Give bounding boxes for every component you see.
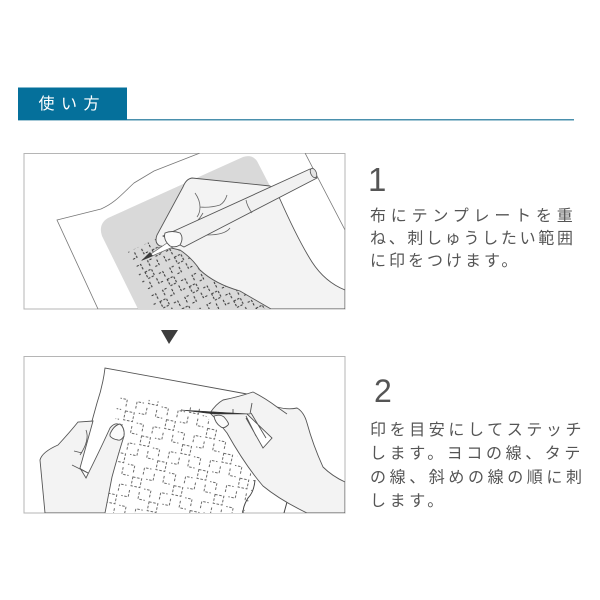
finger creases <box>190 193 230 235</box>
step 1 number: 1 <box>368 161 386 198</box>
arrow: down <box>161 330 178 344</box>
drawing hand <box>156 178 345 309</box>
left thumb nail <box>110 424 124 440</box>
step 1 text: 布にテンプレートを重 <box>370 207 578 225</box>
fabric sheet <box>57 153 345 309</box>
needle <box>181 410 250 414</box>
thumb nail <box>165 232 182 247</box>
step 1 text: ね、刺しゅうしたい範囲 <box>370 230 576 248</box>
heading: 使い方 <box>18 88 574 120</box>
step 2 text <box>370 421 586 510</box>
step 2 number: 2 <box>374 373 392 409</box>
stitch pattern <box>105 395 256 513</box>
step 2 text: します。 <box>370 492 447 510</box>
stitch pattern <box>128 238 275 309</box>
right hand <box>210 392 345 513</box>
step 1 text <box>370 207 578 270</box>
left finger creases <box>72 430 88 473</box>
pen <box>141 167 318 261</box>
right finger nail <box>214 415 228 428</box>
panel: step 2 illustration <box>24 356 345 513</box>
step 2 text: します。ヨコの線、タテ <box>370 444 584 462</box>
heading: 使い方: 使い方 <box>38 95 106 113</box>
fabric fold in fingers <box>233 403 272 448</box>
panel: step 1 illustration <box>24 153 345 309</box>
left hand <box>40 421 124 513</box>
cloth edge <box>243 480 287 513</box>
step 1 text: に印をつけます。 <box>370 252 520 270</box>
fabric sheet <box>106 512 242 513</box>
grey template <box>100 156 270 309</box>
step 2 text: 印を目安にしてステッチ <box>370 421 585 439</box>
step 2 text: の線、斜めの線の順に刺 <box>370 468 586 486</box>
